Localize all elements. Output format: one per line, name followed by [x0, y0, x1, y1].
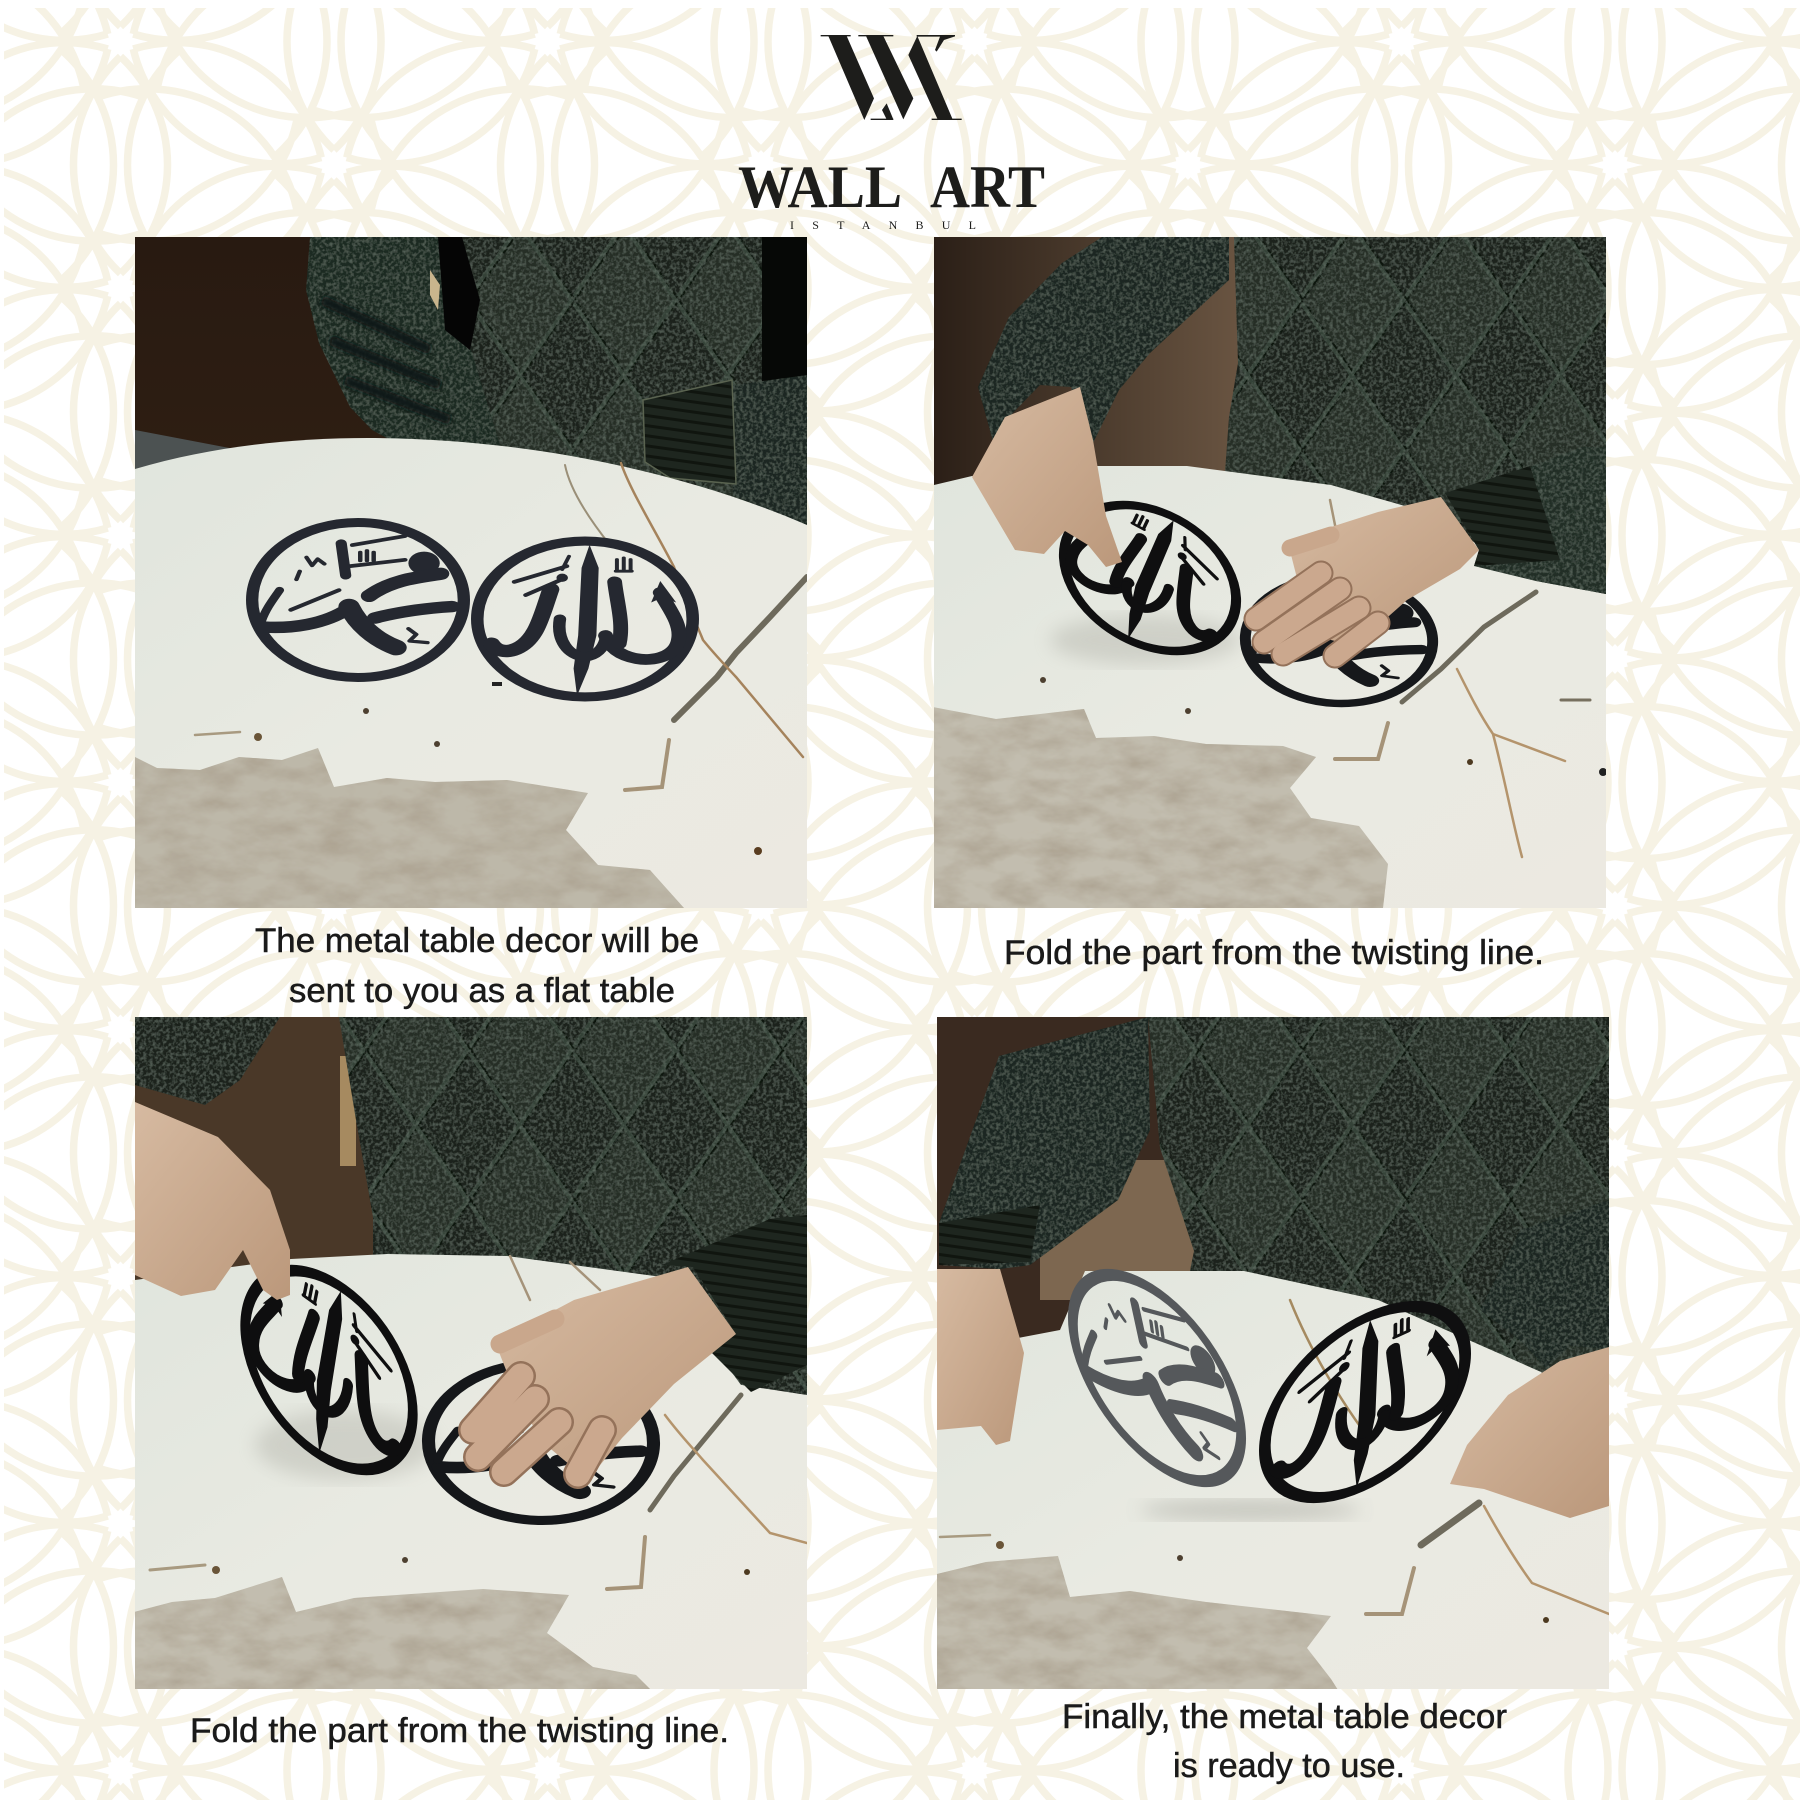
caption: step 4: is ready to use. — [1173, 1747, 1405, 1785]
photo 4: finished decor standing on the table — [937, 1017, 1609, 1690]
marble table top — [134, 1254, 807, 1689]
photo 1: decor lying flat on the table — [135, 237, 807, 908]
flat ring under hand — [426, 1361, 656, 1523]
wordmark: ISTANBUL: ISTANBUL — [790, 218, 976, 232]
sleeve and cuff — [662, 1215, 807, 1392]
right hand — [1450, 1347, 1609, 1518]
photo 3: folding further — [134, 1017, 807, 1689]
left hand holding the ring — [972, 387, 1122, 567]
right sleeve — [1445, 447, 1606, 594]
logo: Wall Art Istanbul — [738, 35, 1045, 232]
right hand flat on the ring — [1256, 497, 1479, 656]
upper arm sleeve — [135, 1017, 280, 1105]
sweater torso — [1148, 1017, 1609, 1373]
caption: step 2: Fold the part from the twisting line. — [1004, 934, 1544, 972]
caption: step 4 — [1062, 1698, 1507, 1785]
sweater sleeve — [939, 1017, 1150, 1269]
icon: WA monogram — [821, 35, 962, 120]
flat ring under hand — [1241, 572, 1437, 708]
gray Muhammad ring — [1068, 1268, 1246, 1488]
photo 2: folding the decor — [933, 237, 1607, 908]
marble table top — [937, 1271, 1609, 1690]
wordmark: ART: ART — [930, 154, 1045, 220]
sweater — [306, 237, 807, 540]
sweater sleeve — [978, 237, 1229, 445]
caption: step 3: Fold the part from the twisting line. — [190, 1712, 729, 1750]
chair back — [340, 1056, 356, 1166]
caption: step 4: Finally, the metal table decor — [1062, 1698, 1507, 1736]
raised Allah ring — [240, 1264, 418, 1476]
raised Allah ring — [1058, 500, 1242, 656]
metal decor: Muhammad ring — [252, 523, 464, 677]
sweater torso — [1223, 237, 1606, 620]
left hand holding the ring — [135, 1102, 290, 1300]
right hand flat on the ring — [473, 1267, 736, 1480]
caption: step 1: sent to you as a flat table — [289, 972, 675, 1010]
caption: step 1: The metal table decor will be — [255, 922, 699, 960]
sweater torso — [339, 1017, 807, 1400]
black Allah ring — [1259, 1300, 1471, 1504]
left hand — [937, 1269, 1024, 1445]
metal decor: Allah ring — [477, 541, 693, 697]
marble table top — [933, 466, 1607, 908]
marble table top — [135, 438, 807, 908]
caption: step 1 — [255, 922, 699, 1010]
wordmark: WALL: WALL — [738, 154, 902, 220]
right sleeve — [1480, 1200, 1609, 1369]
